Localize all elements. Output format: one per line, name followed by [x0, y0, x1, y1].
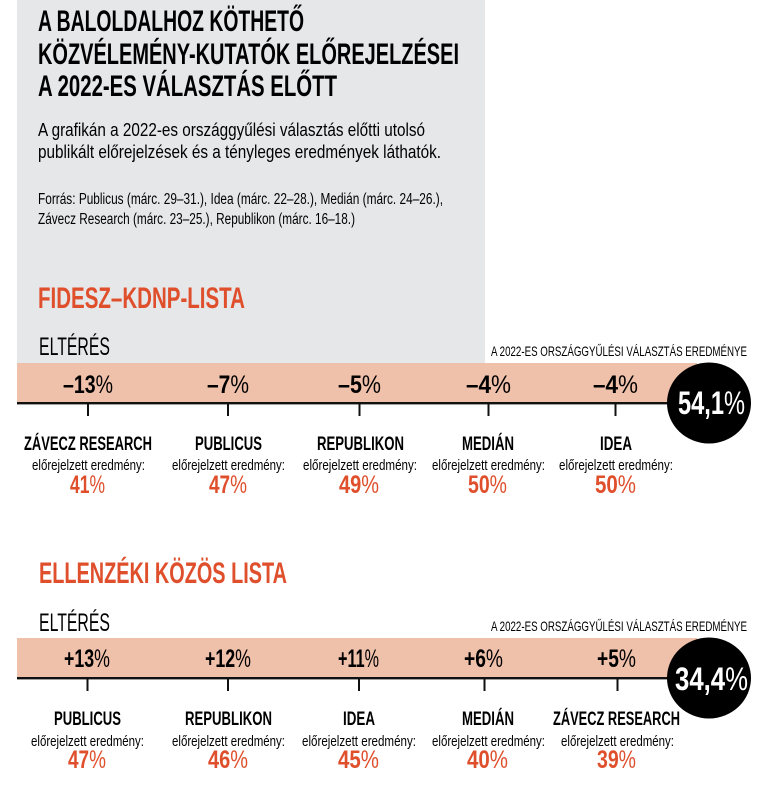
deviation band [17, 363, 697, 403]
pollster: Publicus: előrejelzett eredmény: [172, 458, 285, 474]
deviation values: –4% [593, 371, 638, 399]
pollster: Závecz Research: 41% [70, 471, 105, 499]
pollster: Medián: MEDIÁN [462, 433, 514, 455]
deviation values: –7% [207, 371, 249, 399]
pollster: Publicus: PUBLICUS [54, 709, 121, 730]
pollster: Idea [302, 709, 416, 774]
intro text: A grafikán a 2022-es országgyűlési választás előtti utolsó [38, 120, 425, 140]
pollster: Republikon: előrejelzett eredmény: [303, 458, 417, 474]
pollster: Idea: 50% [595, 471, 636, 499]
pollster: Závecz Research: előrejelzett eredmény: [32, 458, 145, 474]
pollster: Idea: előrejelzett eredmény: [559, 458, 673, 474]
title: A BALOLDALHOZ KÖTHETŐ [38, 4, 304, 38]
deviation values: +6% [464, 645, 503, 673]
deviation values: +11% [338, 645, 379, 673]
pollster: Závecz Research: előrejelzett eredmény: [561, 734, 674, 750]
result circle: 34,4% [667, 638, 751, 718]
pollster: Závecz Research: ZÁVECZ RESEARCH [24, 433, 152, 455]
pollster: Publicus: PUBLICUS [195, 434, 262, 455]
heading: Fidesz-KDNP: FIDESZ–KDNP-LISTA [38, 282, 245, 315]
pollster: Závecz Research [24, 433, 152, 499]
pollster: Medián: előrejelzett eredmény: [432, 734, 545, 750]
pollster: Republikon: REPUBLIKON [185, 709, 272, 730]
pollster: Závecz Research: 39% [597, 746, 636, 774]
pollster: Republikon: előrejelzett eredmény: [172, 734, 285, 750]
deviation values: +12% [205, 645, 251, 673]
pollster: Republikon: 46% [208, 746, 248, 774]
pollster: Medián: MEDIÁN [462, 708, 514, 730]
pollster: Republikon [303, 434, 417, 499]
pollster: Republikon: 49% [339, 471, 379, 499]
deviation values [64, 645, 636, 673]
panel: opposition joint list [17, 556, 751, 774]
deviation values: –4% [466, 371, 511, 399]
panel: grey header background [17, 0, 485, 363]
deviation values [63, 371, 638, 399]
panel: Fidesz-KDNP list [17, 282, 751, 499]
result circle: 34,4%: 34,4% [675, 661, 748, 697]
sources: Forrás: Publicus (márc. 29–31.), Idea (márc. 22–28.), Medián (márc. 24–26.), [38, 191, 443, 208]
pollster: Idea [559, 434, 673, 499]
pollster: Medián: 50% [468, 471, 507, 499]
sources: Závecz Research (márc. 23–25.), Republikon (márc. 16–18.) [38, 211, 355, 228]
axis with ticks [17, 402, 697, 416]
result circle: 54,1%: 54,1% [678, 385, 745, 421]
pollster: Publicus [172, 434, 285, 499]
intro text [38, 120, 441, 162]
pollster: Medián: 40% [467, 746, 508, 774]
pollster: Republikon: REPUBLIKON [317, 434, 404, 455]
deviation values: –13% [63, 371, 113, 399]
axis with ticks [17, 677, 697, 691]
pollster: Publicus: 47% [209, 471, 247, 499]
pollster: Medián [432, 433, 545, 499]
pollster: Idea: előrejelzett eredmény: [302, 734, 416, 750]
pollster: Publicus: előrejelzett eredmény: [31, 734, 144, 750]
deviation values: +5% [597, 645, 636, 673]
intro text: publikált előrejelzések és a tényleges eredmények láthatók. [38, 142, 441, 162]
label: deviation: ELTÉRÉS [39, 332, 110, 361]
pollster: Závecz Research: ZÁVECZ RESEARCH [553, 708, 680, 730]
pollster: Idea: IDEA [343, 709, 375, 730]
pollster: Publicus: 47% [68, 746, 106, 774]
heading: opposition: ELLENZÉKI KÖZÖS LISTA [39, 556, 287, 590]
deviation values: –5% [338, 371, 381, 399]
pollster: Publicus [31, 709, 144, 774]
pollster: Závecz Research [553, 708, 680, 774]
title: A 2022-ES VÁLASZTÁS ELŐTT [38, 69, 337, 103]
sources [38, 191, 443, 228]
pollster: Medián: előrejelzett eredmény: [432, 458, 545, 474]
pollster: Medián [432, 708, 545, 774]
label: deviation: ELTÉRÉS [39, 608, 110, 637]
title: KÖZVÉLEMÉNY-KUTATÓK ELŐREJELZÉSEI [38, 37, 459, 71]
deviation band [17, 638, 697, 678]
pollster: Republikon [172, 709, 285, 774]
pollster: Idea: 45% [338, 746, 379, 774]
pollster: Idea: IDEA [600, 434, 632, 455]
result circle: 54,1% [667, 362, 751, 444]
deviation values: +13% [64, 645, 110, 673]
title [38, 4, 459, 103]
